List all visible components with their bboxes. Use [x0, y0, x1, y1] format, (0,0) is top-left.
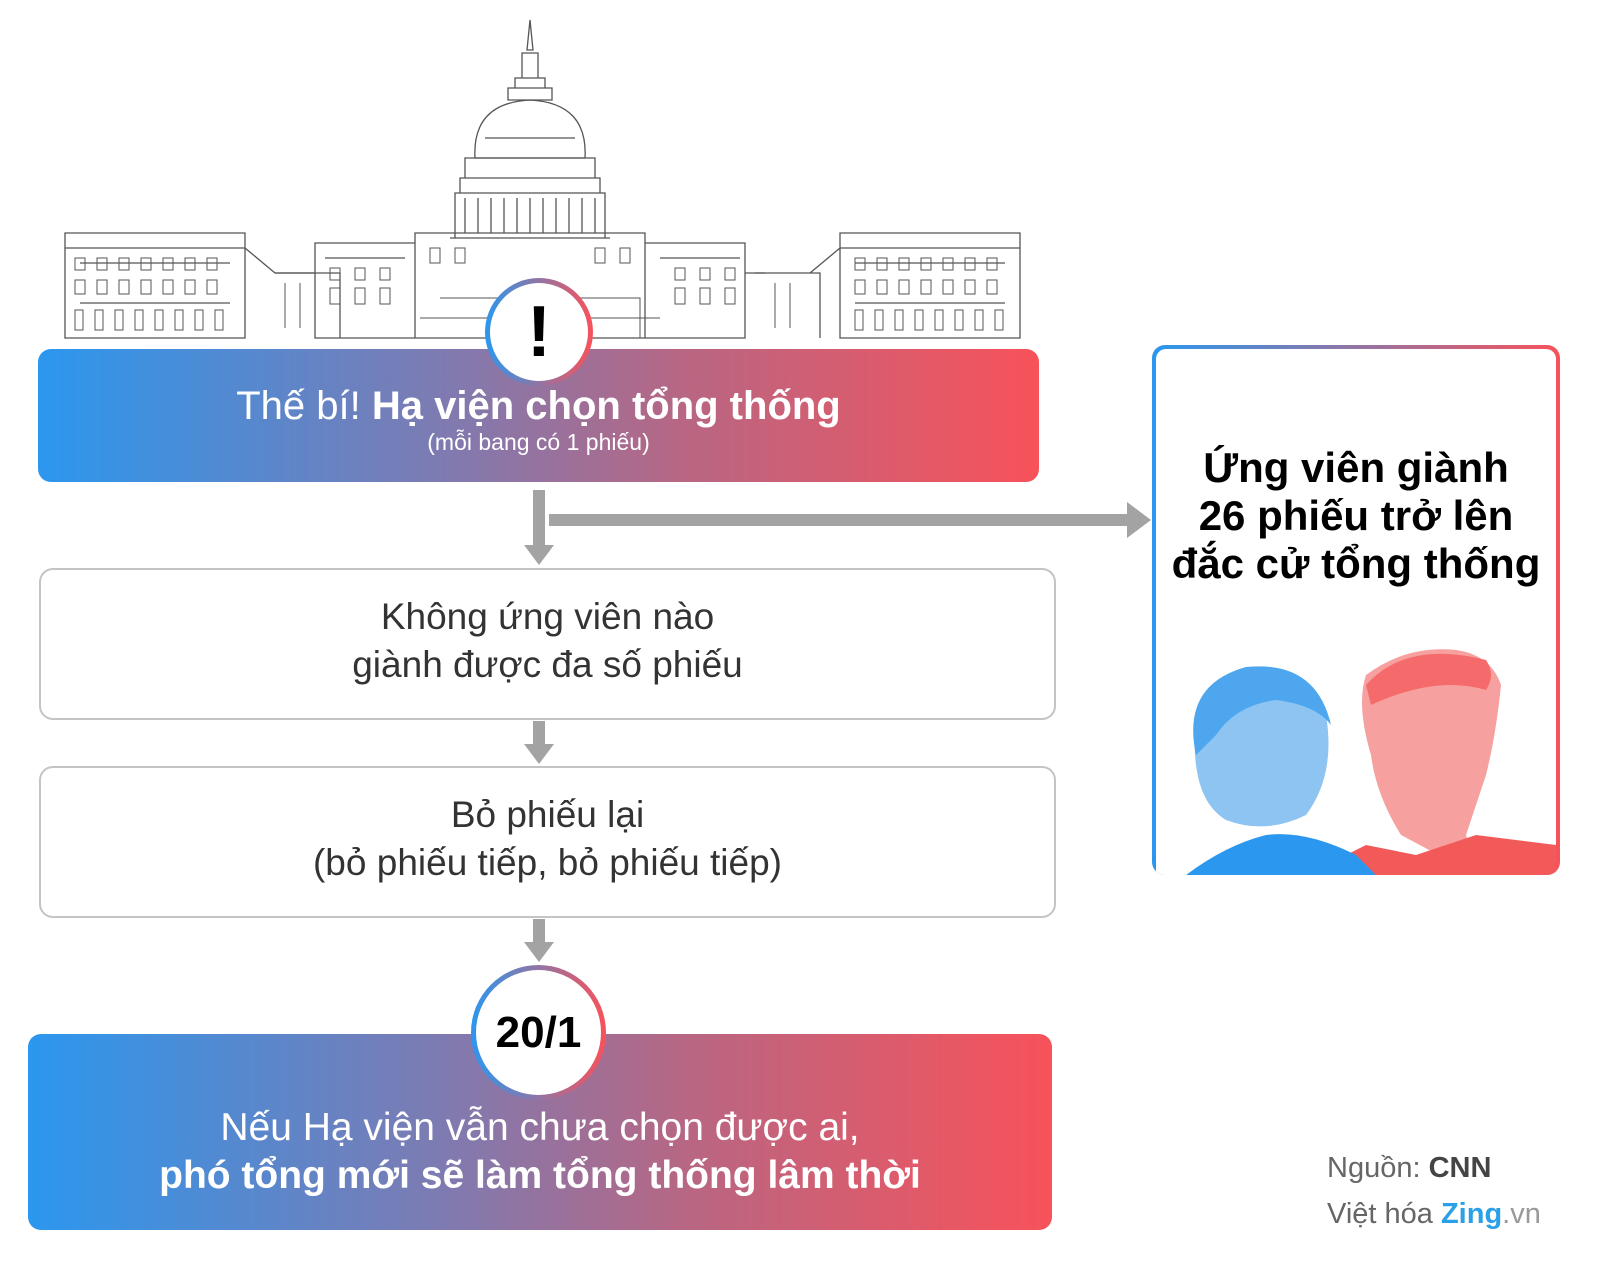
winner text: đắc cử tổng thống: [1172, 540, 1540, 587]
winner text: 26 phiếu trở lên: [1199, 492, 1513, 539]
arrow: down to box 3: [524, 721, 554, 764]
date circle 20/1: [471, 965, 606, 1100]
arrow: right to winner box: [549, 502, 1151, 538]
bottom banner: vice president acts: Nếu Hạ viện vẫn chưa chọn được ai,: [220, 1106, 860, 1149]
winner text: Ứng viên giành: [1203, 444, 1509, 491]
date circle 20/1: 20/1: [496, 1008, 581, 1057]
winner text: [1172, 444, 1540, 587]
icon: exclamation circle: !: [527, 292, 551, 372]
capitol building illustration: [64, 20, 1021, 339]
source credit: [1327, 1152, 1541, 1230]
bottom banner: vice president acts: phó tổng mới sẽ làm tổng thống lâm thời: [159, 1154, 921, 1197]
bottom banner: vice president acts: [28, 1034, 1052, 1230]
box: revote: Bỏ phiếu lại: [451, 794, 644, 835]
illustration: candidates: [1186, 649, 1556, 875]
arrow: down to box 2: [524, 490, 554, 565]
top banner: House chooses president: Thế bí! Hạ viện chọn tổng thống: [236, 384, 841, 428]
arrow: down to final: [524, 919, 554, 962]
source credit: Nguồn: CNN: [1327, 1152, 1491, 1184]
source credit: Việt hóa Zing.vn: [1327, 1198, 1541, 1230]
top banner: House chooses president: (mỗi bang có 1 phiếu): [427, 429, 650, 455]
panel: winner box: [1152, 345, 1560, 875]
icon: exclamation circle: [485, 278, 593, 386]
box: revote: (bỏ phiếu tiếp, bỏ phiếu tiếp): [313, 842, 782, 883]
box: revote: [39, 766, 1056, 918]
top banner: House chooses president: [38, 349, 1039, 482]
box: no majority: [39, 568, 1056, 720]
box: no majority: Không ứng viên nào: [381, 596, 714, 637]
box: no majority: giành được đa số phiếu: [352, 644, 743, 685]
